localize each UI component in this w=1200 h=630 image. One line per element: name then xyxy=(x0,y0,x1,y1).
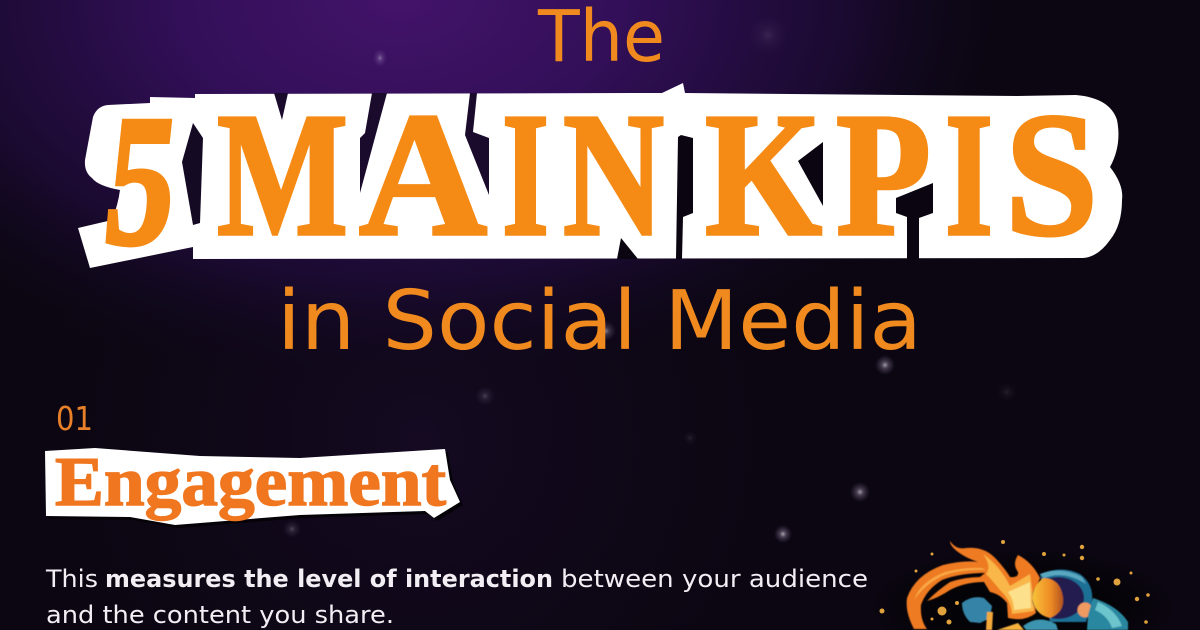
title sticker: 5 MAIN KPIS: A xyxy=(359,77,487,273)
body text: measures the level of interaction xyxy=(105,565,553,593)
body text: This xyxy=(45,565,98,593)
icon: flame xyxy=(907,541,1040,629)
section heading sticker: Engagement: Engagement xyxy=(55,444,446,521)
body text: between your audience xyxy=(561,565,868,593)
title sticker: 5 MAIN KPIS: 5 xyxy=(97,78,186,284)
icon: gloves xyxy=(962,597,1058,630)
title sticker: 5 MAIN KPIS xyxy=(78,77,1122,284)
section number: 01 xyxy=(56,399,93,438)
title sticker: 5 MAIN KPIS: N xyxy=(563,77,664,273)
icon: astronaut with flame xyxy=(880,540,1150,630)
icon: helmet xyxy=(1032,570,1092,622)
body text: and the content you share. xyxy=(46,601,394,629)
title line: in Social Media: in Social Media xyxy=(277,274,922,369)
title sticker: 5 MAIN KPIS: I xyxy=(945,77,993,273)
body text xyxy=(45,565,868,629)
title sticker: 5 MAIN KPIS: P xyxy=(836,77,931,273)
icon: suit body xyxy=(1087,598,1128,630)
title sticker: 5 MAIN KPIS: I xyxy=(502,77,549,273)
title sticker: 5 MAIN KPIS: M xyxy=(217,77,348,273)
icon: small stars xyxy=(880,540,1150,624)
title xyxy=(78,0,1122,369)
title sticker: 5 MAIN KPIS: K xyxy=(705,77,822,273)
title sticker: 5 MAIN KPIS: S xyxy=(1005,77,1098,273)
